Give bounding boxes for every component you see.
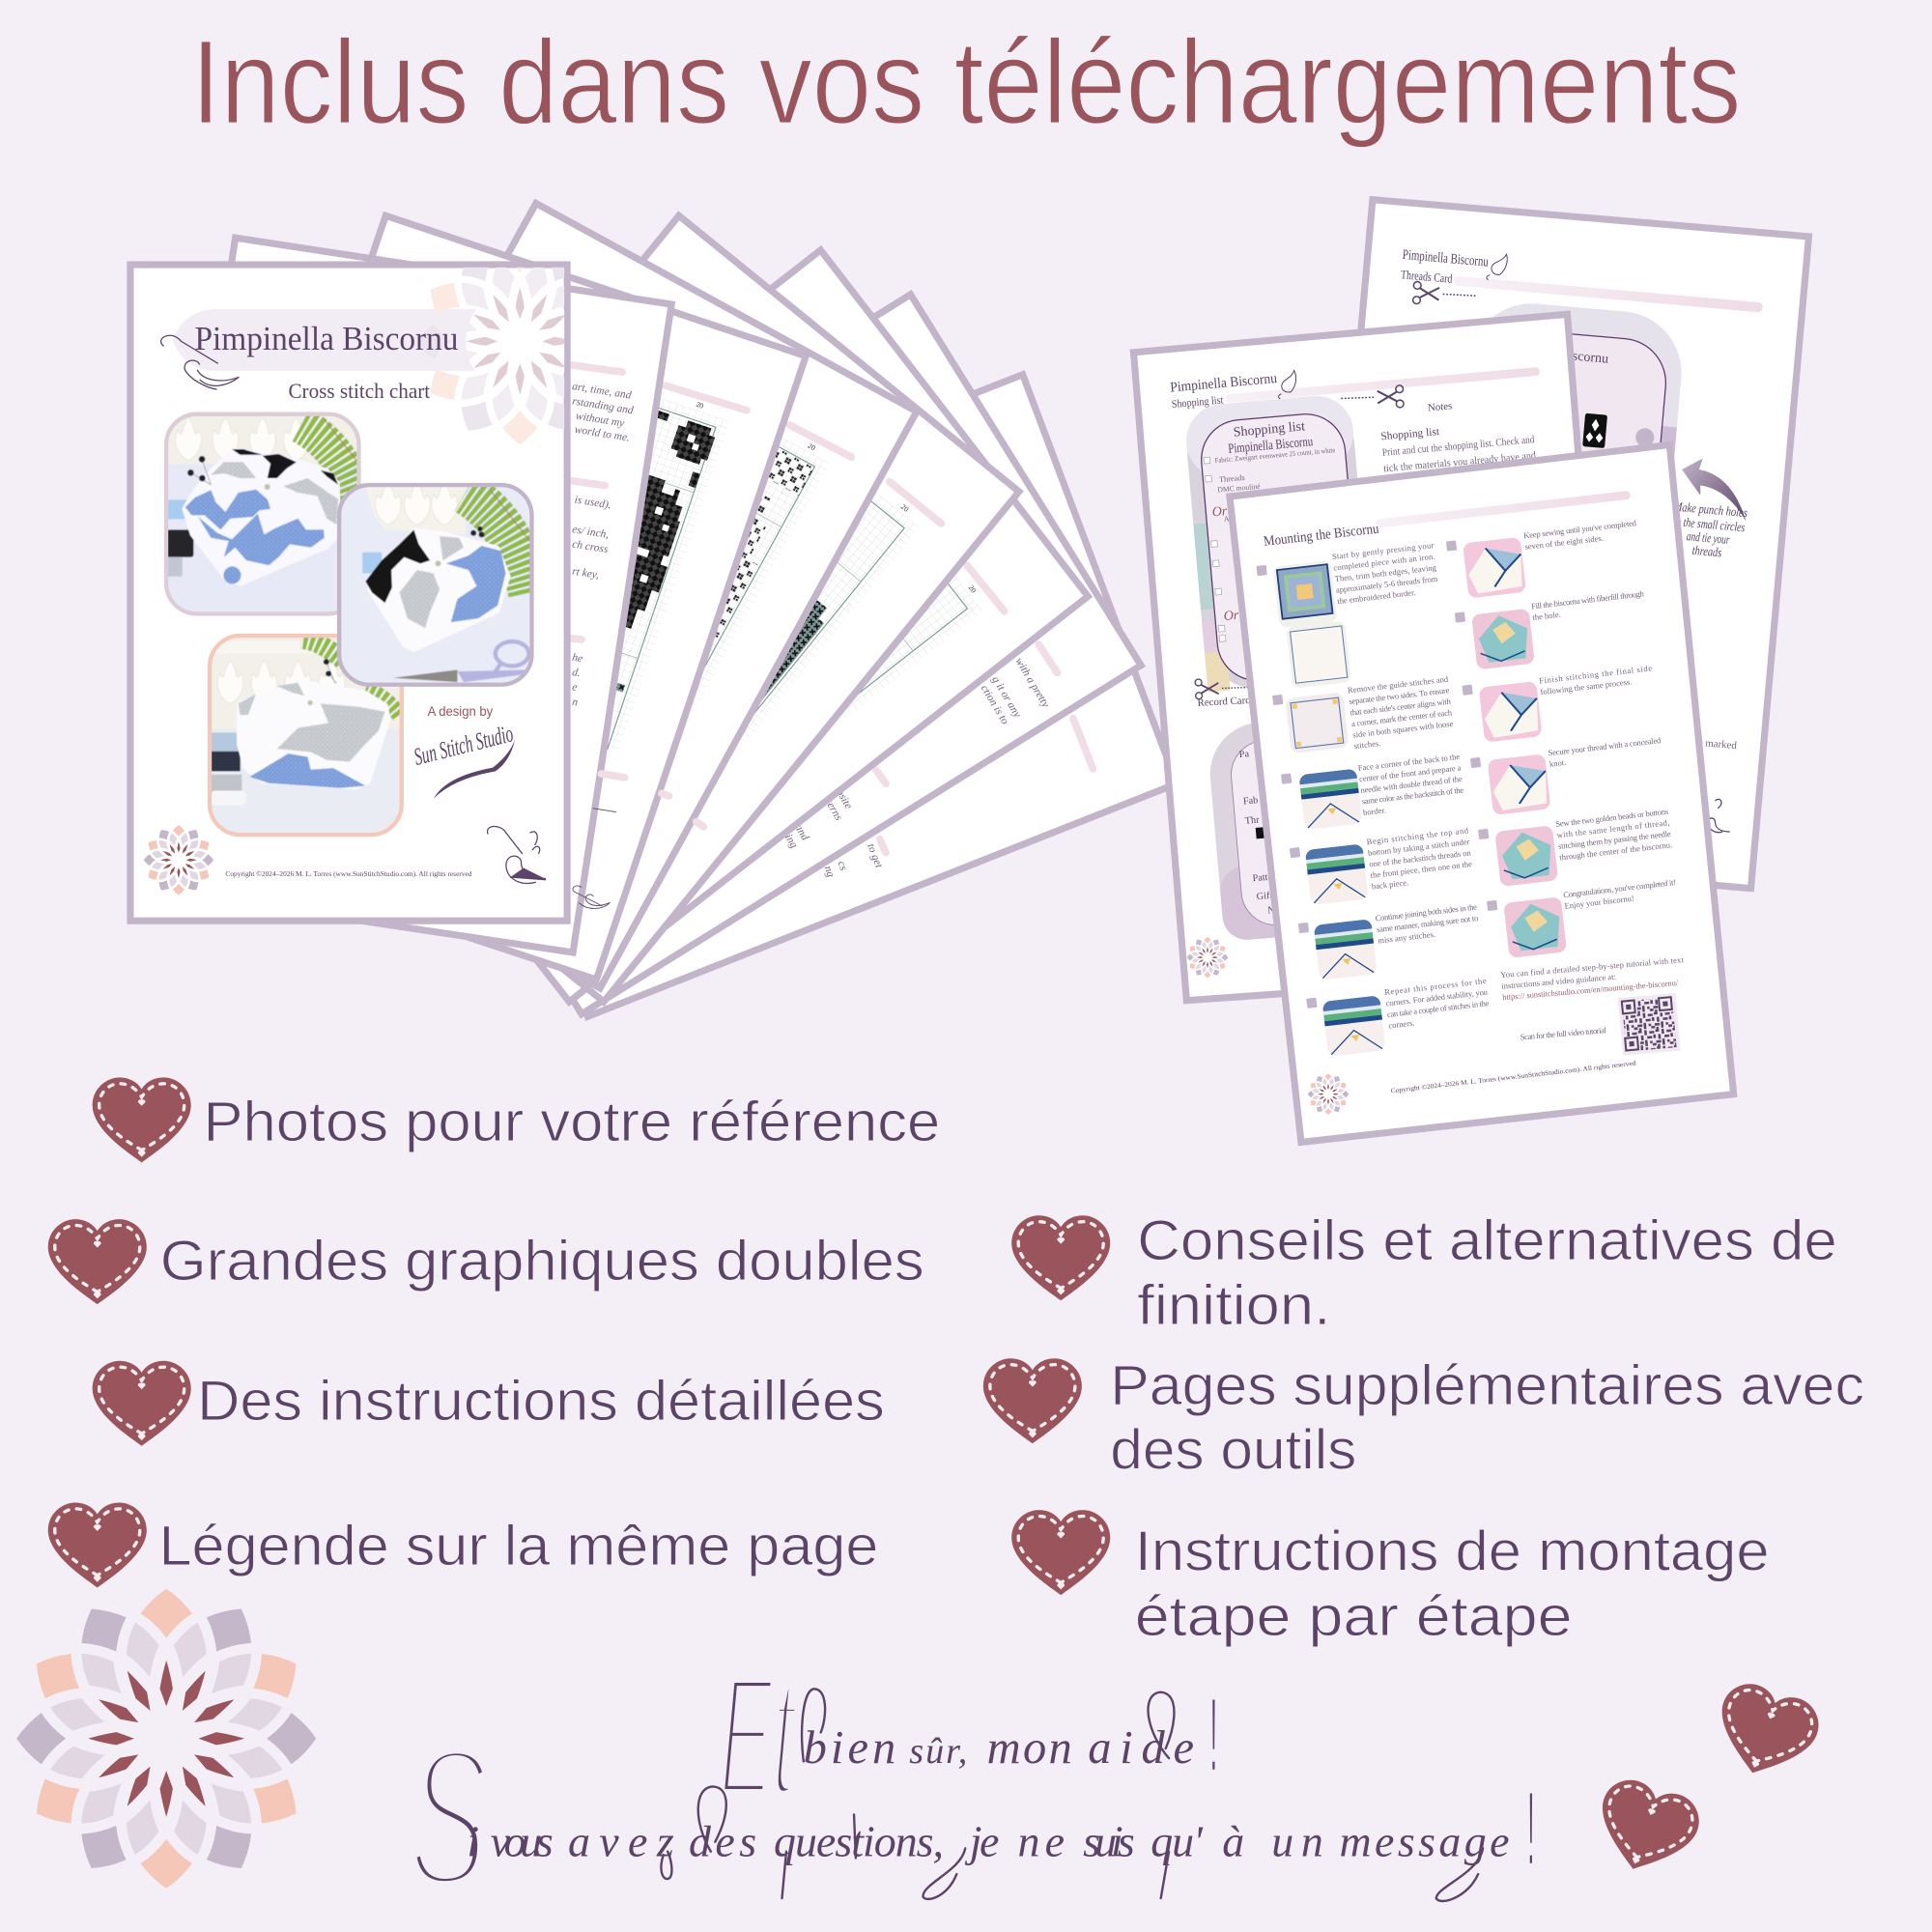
step 6: can take a couple of stitches in the	[1386, 998, 1490, 1019]
step 1: completed piece with an iron.	[1333, 552, 1435, 573]
page 1 with text: d.	[571, 667, 582, 679]
step 2: separate the two sides. To ensure	[1349, 685, 1450, 706]
step 2: side in both squares with loose	[1352, 719, 1454, 740]
page 1 with text: rstanding and	[571, 395, 635, 416]
step 5	[1298, 901, 1480, 980]
step 2	[1272, 674, 1456, 753]
step 4: back piece.	[1371, 877, 1409, 891]
heart top right	[1706, 1677, 1826, 1788]
threads card heading: Threads Card	[1400, 268, 1454, 286]
step 3	[1281, 752, 1465, 830]
cover flourish bottom right	[488, 827, 546, 883]
page 6: with a pretty	[1012, 656, 1052, 710]
step 5: same manner, making sure not to	[1376, 913, 1479, 934]
step 2: that each side's center aligns with	[1350, 696, 1452, 718]
page 6: and	[792, 822, 810, 842]
step 9: following the same process.	[1540, 676, 1633, 696]
feature: extra pages	[1110, 1354, 1864, 1481]
step 4: one of the backstitch threads on	[1369, 847, 1472, 868]
punch-hole note	[1668, 499, 1748, 561]
shopping card: Shopping list	[1233, 418, 1306, 440]
tutorial note	[1500, 954, 1687, 1002]
punch-hole note: Make punch holes	[1672, 499, 1748, 520]
script line 1: mon	[987, 1722, 1072, 1774]
step 4: Begin stitching the top and	[1366, 825, 1469, 846]
step 10	[1470, 735, 1663, 815]
page 6: g it or any	[989, 674, 1023, 721]
feature: instructions: Des instructions détaillées	[197, 1370, 885, 1433]
threads card illustration	[1439, 298, 1687, 734]
step 1: Then, trim both edges, leaving	[1334, 562, 1437, 583]
document fan: chart and instruction pages	[135, 203, 1177, 1016]
punch hole	[1635, 428, 1654, 446]
heading	[1263, 491, 1632, 550]
script line 1: sûr,	[909, 1731, 967, 1772]
scissors	[1412, 281, 1477, 307]
heart 2	[48, 1219, 147, 1304]
page 7	[439, 375, 1177, 1016]
step 11: with the same length of thread,	[1556, 817, 1670, 839]
tutorial note: instructions and video guidance at:	[1501, 972, 1616, 991]
step 5: Continue joining both sides in the	[1375, 901, 1478, 923]
script line 2: !	[1526, 1770, 1535, 1887]
feature: tips	[1137, 1209, 1837, 1337]
shopping card: Any	[1223, 514, 1237, 524]
shopping card	[1183, 393, 1375, 693]
page 1 with text: rt key,	[571, 565, 600, 582]
step 2: Remove the guide stitches and	[1348, 674, 1449, 695]
cover mandala, pale	[431, 267, 564, 444]
script line 1: aide	[1088, 1722, 1194, 1774]
step 1: the embroidered border.	[1337, 587, 1416, 606]
page 1 with text: is used).	[574, 495, 612, 511]
page 1 with text: world to me.	[574, 424, 631, 444]
page 5 with chart: 20	[967, 583, 979, 595]
card label: scornu	[1572, 348, 1609, 367]
page 2 with black chart	[175, 215, 806, 980]
script line 2: un	[1271, 1817, 1323, 1866]
heart 1	[93, 1077, 191, 1162]
page 2 with black chart: 20	[695, 400, 705, 411]
feature: photos: Photos pour votre référence	[203, 1091, 940, 1153]
page 6: ction is to	[979, 683, 1010, 726]
threads card page	[1315, 200, 1808, 889]
script line 2: i	[467, 1817, 479, 1866]
copyright: Copyright ©2024–2026 M. L. Torres (www.SunStitchStudio.com). All rights reserved	[1390, 1060, 1636, 1094]
step 9	[1462, 663, 1654, 743]
step 8	[1455, 588, 1646, 670]
step 10: Secure your thread with a concealed	[1548, 735, 1662, 757]
tutorial note: You can find a detailed step-by-step tutorial with text	[1500, 954, 1685, 980]
feature: tips: Conseils et alternatives de	[1137, 1209, 1837, 1272]
designer credit	[412, 704, 516, 799]
page 7: cs	[836, 860, 849, 872]
cover title: Pimpinella Biscornu	[195, 321, 458, 357]
feature: extra pages: des outils	[1110, 1418, 1356, 1481]
shopping notes: Notes	[1428, 400, 1453, 413]
page 5 with chart	[299, 250, 1088, 1002]
step 4: the front piece, then one on the	[1370, 859, 1473, 880]
heart lower right	[1586, 1773, 1706, 1884]
script line 2: ne	[1018, 1817, 1065, 1866]
step 5: miss any stitches.	[1378, 929, 1435, 945]
cover subtitle: Cross stitch chart	[288, 380, 430, 403]
record card illustration	[1206, 714, 1372, 942]
page 6: -bsite	[832, 784, 854, 811]
shopping card: Or	[1223, 608, 1239, 624]
page 1 with text: ch cross	[571, 538, 610, 555]
copyright: Copyright ©2024–2026 M. L. Torres (www.SunStitchStudio.com). All rights reserved	[225, 871, 472, 878]
step 2: stitches.	[1353, 738, 1381, 751]
shopping card: Pimpinella Biscornu	[1228, 434, 1314, 457]
photo 3	[210, 636, 402, 835]
heart 4	[48, 1502, 147, 1587]
punch-hole note: threads	[1691, 543, 1722, 559]
title flourish	[1276, 370, 1297, 399]
title flourish	[1487, 253, 1508, 281]
heart 7	[1011, 1510, 1110, 1595]
page 1 with text	[135, 238, 671, 952]
page 1 with text: art, time, and	[571, 381, 633, 402]
scissors	[1340, 385, 1404, 410]
step 3: center of the front and prepare a	[1359, 762, 1462, 783]
mini mandala	[1308, 1073, 1349, 1115]
shopping card: Fabric: Zweigart evenweave 25 count, in white	[1214, 445, 1336, 465]
feature: mounting: Instructions de montage	[1135, 1520, 1770, 1583]
large mandala	[16, 1589, 316, 1889]
step 8: Fill the biscornu with fiberfill through	[1531, 588, 1645, 611]
designer credit: Sun Stitch Studio	[412, 719, 516, 771]
script line 2: vous	[491, 1817, 554, 1866]
step 11	[1478, 807, 1673, 887]
script line 2: suis	[1083, 1817, 1135, 1866]
script line 2	[409, 1707, 1535, 1927]
marked note: c marked	[1697, 737, 1738, 752]
step 11: through the center of the biscornu.	[1559, 839, 1673, 862]
script line 1	[720, 1640, 1218, 1830]
designer credit: A design by	[428, 704, 494, 719]
script flourishes, left	[661, 1689, 965, 1899]
scan note: Scan for the full video tutorial	[1520, 1025, 1607, 1042]
page 3 with chart	[216, 203, 917, 988]
cover title pill	[173, 309, 487, 371]
heading: Mounting the Biscornu	[1263, 521, 1380, 550]
step 12	[1487, 877, 1678, 958]
step 7: seven of the eight sides.	[1524, 533, 1604, 552]
shopping card: DMC mouliné	[1217, 482, 1262, 495]
photo 2	[339, 481, 531, 685]
script line 2: je	[965, 1817, 999, 1866]
punch-hole note: and tie your	[1686, 528, 1731, 547]
heart 6	[983, 1358, 1082, 1443]
cover page	[127, 261, 571, 924]
heart 5	[1011, 1215, 1110, 1300]
cover frame	[130, 265, 567, 921]
step 3: needle with double thread of the	[1360, 774, 1463, 795]
script line 2: avez	[568, 1817, 674, 1866]
script flourishes, right	[1149, 1692, 1483, 1901]
shopping card: Threads	[1219, 473, 1245, 484]
step 9: Finish stitching the final side	[1539, 663, 1653, 686]
script line 1: bien	[804, 1722, 895, 1774]
feature: legend: Légende sur la même page	[159, 1515, 878, 1577]
step 10: knot.	[1548, 757, 1567, 769]
step 8: the hole.	[1532, 610, 1561, 622]
step 3: same color as the backstitch of the	[1361, 784, 1464, 806]
script line 1: Et	[720, 1640, 798, 1830]
script line 2: qu'	[1151, 1817, 1204, 1866]
script line 2: à	[1222, 1817, 1244, 1866]
script line 2: message	[1339, 1817, 1509, 1866]
shopping heading	[1170, 348, 1541, 411]
heart 3	[93, 1361, 191, 1446]
QR code	[1618, 993, 1681, 1056]
mini mandala	[1187, 937, 1228, 978]
page 1 with text: without my	[575, 411, 626, 430]
cover photos	[166, 414, 531, 835]
page 1 with text: he	[571, 652, 583, 665]
feature: tips: finition.	[1137, 1274, 1331, 1337]
tutorial note: https:// sunstitchstudio.com/en/mounting-the-biscornu/	[1502, 978, 1679, 1002]
step 7	[1446, 518, 1638, 599]
mounting instructions page	[1230, 444, 1734, 1142]
record card illustration: Thr	[1244, 814, 1261, 827]
step 4	[1290, 825, 1474, 905]
script line 2: questions,	[774, 1817, 944, 1866]
step 1: approximately 5-6 threads from	[1335, 574, 1438, 595]
script line 2: des	[689, 1817, 756, 1866]
record card label: Record Card	[1197, 695, 1251, 709]
step 12: Enjoy your biscornu!	[1564, 894, 1634, 911]
record card illustration: Pa	[1238, 749, 1250, 760]
step 4: bottom by taking a stitch under	[1367, 837, 1470, 858]
step 11: Sew the two golden beads or buttons	[1555, 807, 1669, 829]
feature: mounting: étape par étape	[1135, 1585, 1573, 1648]
record card illustration: Gifte	[1256, 890, 1278, 902]
shopping list page	[1133, 314, 1619, 1001]
record card illustration: Fab	[1243, 795, 1259, 807]
shopping notes: Print and cut the shopping list. Check and	[1381, 434, 1535, 459]
script line 1: !	[1209, 1676, 1218, 1793]
cover flourish	[161, 335, 239, 389]
step 3: border.	[1362, 805, 1386, 817]
step 3: Face a corner of the back to the	[1357, 752, 1461, 773]
step 6: corners.	[1388, 1018, 1415, 1031]
threads card heading: Pimpinella Biscornu	[1402, 247, 1490, 270]
step 1: Start by gently pressing your	[1331, 540, 1435, 561]
page 4 with chart	[263, 215, 1019, 1002]
shopping notes: tick the materials you already have and	[1383, 450, 1537, 474]
cover mini mandala	[144, 825, 213, 895]
page 1 with text: e	[571, 681, 578, 694]
page 4 with chart: 20	[899, 502, 911, 514]
title: Inclus dans vos téléchargements	[191, 16, 1741, 150]
page 6	[352, 295, 1141, 1014]
script line 2: S	[409, 1707, 488, 1927]
small flourish	[1708, 799, 1730, 833]
punch-hole note: in the small circles	[1673, 514, 1746, 534]
scissors record card	[1195, 677, 1252, 699]
curved arrow	[1682, 458, 1746, 522]
step 2: a corner, mark the center of each	[1350, 707, 1453, 728]
feature: extra pages: Pages supplémentaires avec	[1110, 1354, 1864, 1417]
page 1 with text: n	[571, 696, 579, 708]
step 12: Congratulations, you've completed it!	[1563, 877, 1676, 899]
step 7: Keep sewing until you've completed	[1523, 518, 1637, 540]
page 6: terns	[823, 798, 844, 823]
page 7: ng	[822, 865, 837, 879]
step 11: stitching them by passing the needle	[1557, 829, 1671, 851]
feature: mounting	[1135, 1520, 1770, 1648]
shopping card: Or	[1211, 503, 1228, 520]
page 7: to get	[865, 842, 885, 870]
step 1	[1256, 540, 1440, 689]
record card illustration: Patte	[1252, 872, 1273, 884]
shopping notes	[1378, 393, 1537, 474]
page 3 with chart: 20	[807, 441, 817, 452]
step 6: Repeat this process for the	[1384, 976, 1487, 997]
feature: charts: Grandes graphiques doubles	[160, 1230, 924, 1293]
shopping heading: Pimpinella Biscornu	[1170, 371, 1278, 396]
step 6	[1306, 976, 1492, 1057]
shopping notes: Shopping list	[1380, 426, 1440, 442]
page 1 with text: es/ inch,	[571, 524, 610, 541]
photo 1	[166, 414, 358, 613]
shopping heading: Shopping list	[1171, 394, 1225, 411]
threads card heading	[1400, 247, 1765, 313]
page 6: ing	[782, 832, 800, 850]
step 6: corners. For added stability, you	[1385, 986, 1489, 1008]
record card illustration: Not	[1267, 904, 1283, 916]
